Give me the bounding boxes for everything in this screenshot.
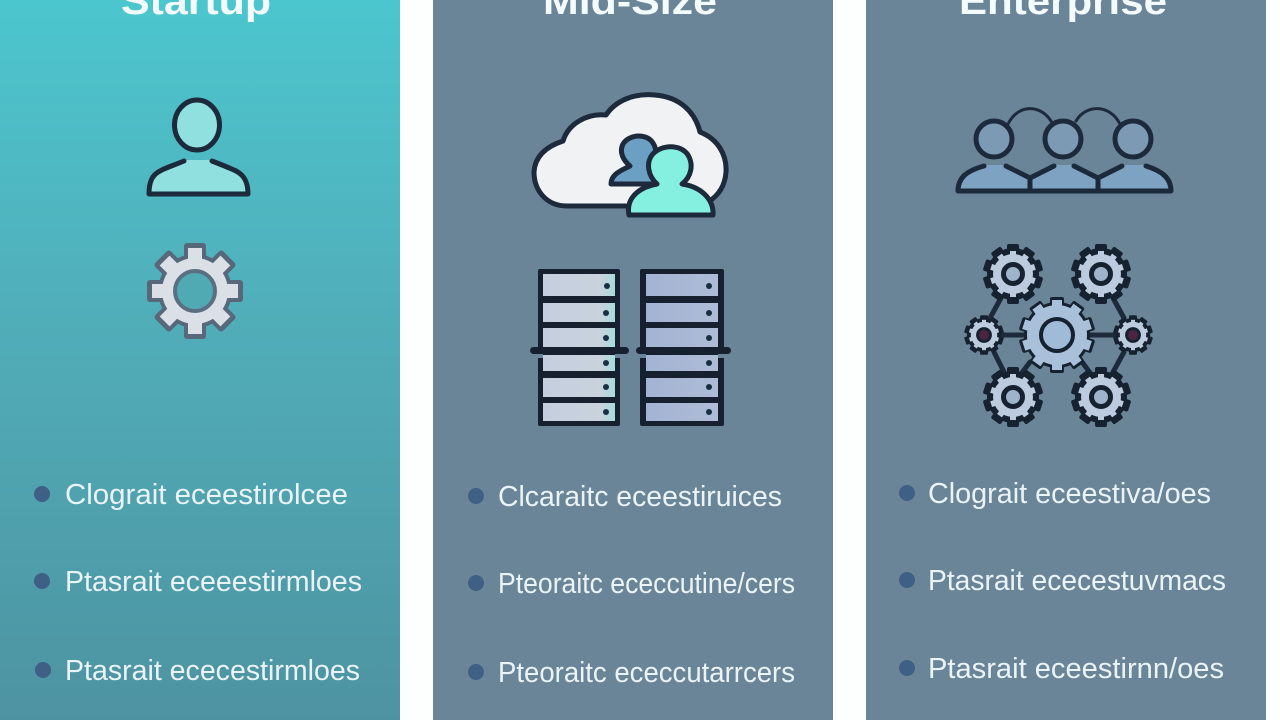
list: startup items: Ptasrait ececestirmloes <box>65 655 360 687</box>
list: mid-size items: Clcaraitc eceestiruices <box>498 481 782 513</box>
icon: single user <box>149 100 248 194</box>
list: enterprise items: Ptasrait ececestuvmacs <box>928 565 1226 597</box>
icon: cloud with users <box>534 95 726 215</box>
panel: mid-size <box>433 0 833 720</box>
list: enterprise items <box>899 478 1226 685</box>
list: mid-size items: Pteoraitc ececcutine/cers <box>498 568 795 600</box>
list: startup items <box>34 479 362 687</box>
list: mid-size items: Pteoraitc ececcutarrcers <box>498 657 795 689</box>
list: startup items: Ptasrait eceeestirmloes <box>65 566 362 598</box>
icon: gear network <box>964 244 1153 427</box>
icon: user group <box>958 109 1171 191</box>
list: enterprise items: Clograit eceestiva/oes <box>928 478 1211 510</box>
list: enterprise items: Ptasrait eceestirnn/oes <box>928 653 1224 685</box>
panel: enterprise <box>866 0 1266 720</box>
list: startup items: Clograit eceestirolcee <box>65 479 348 511</box>
list: mid-size items <box>468 481 795 689</box>
icon: server racks <box>530 269 731 426</box>
panel: startup <box>0 0 400 720</box>
icon: gear <box>147 243 243 339</box>
